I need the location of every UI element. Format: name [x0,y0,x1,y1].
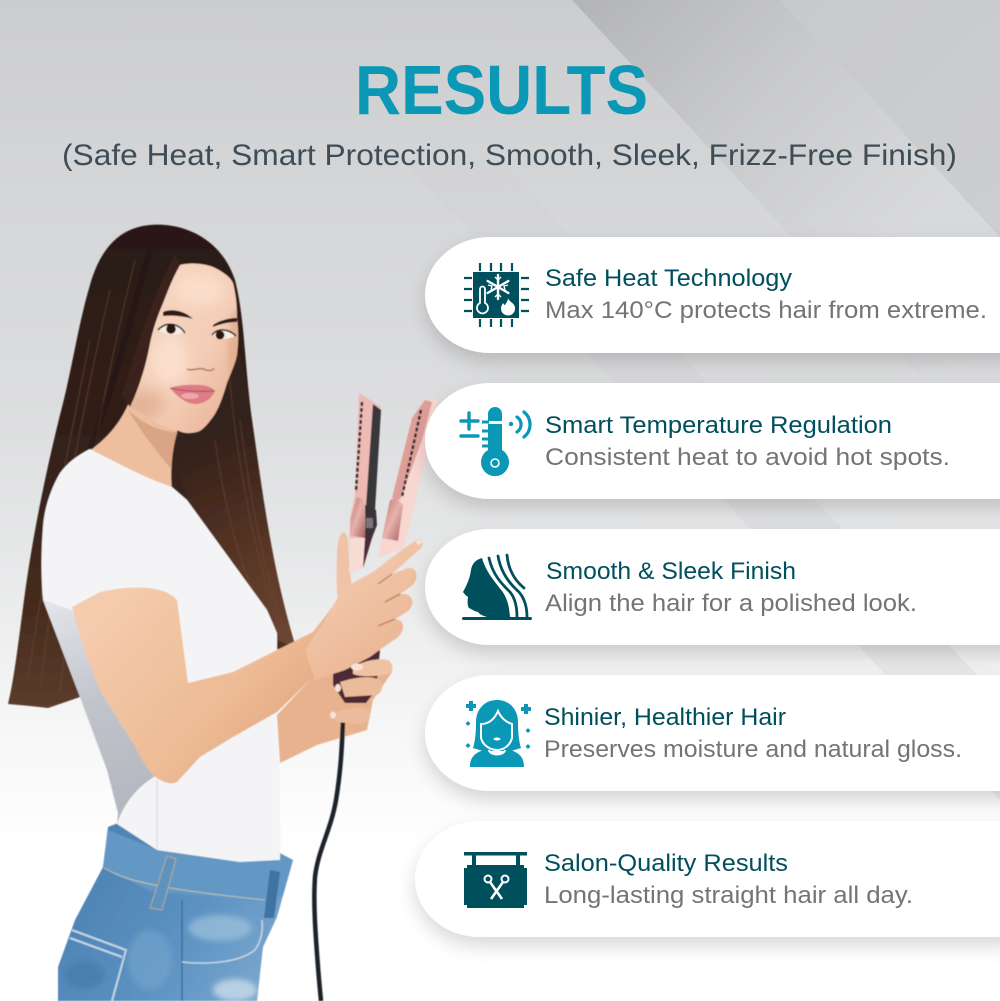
nose [187,368,214,371]
text: salon-quality description: Long-lasting straight hair all day. [544,882,913,909]
subtitle: (Safe Heat, Smart Protection, Smooth, Sleek, Frizz-Free Finish) [62,139,957,172]
lower hand [277,660,392,763]
power cord [314,720,343,1001]
text: safe heat technology: Safe Heat Technology [545,265,793,292]
thumb [337,532,352,600]
lips [170,385,215,404]
eyes [158,324,236,339]
panel: salon-quality results [415,821,1000,937]
neck shadow [128,410,178,470]
panel: smooth and sleek finish [425,529,1000,645]
title: RESULTS [355,51,648,129]
face shading [130,274,239,422]
text: smart temperature description: Consistent heat to avoid hot spots. [545,444,950,471]
text: smooth and sleek finish: Smooth & Sleek Finish [546,558,796,585]
text: salon-quality results: Salon-Quality Results [544,850,788,877]
text: smooth and sleek description: Align the hair for a polished look. [545,590,917,617]
icon: thermometer with signal [461,407,530,476]
icon: chip with temperature [464,263,529,327]
icon: salon sign with scissors [464,852,527,908]
jeans [58,823,293,1001]
hand [305,539,423,680]
text: shinier healthier description: Preserves moisture and natural gloss. [544,736,962,763]
straightener [333,393,438,703]
handle grip [333,650,380,703]
face [131,262,240,434]
woman holding hair straightener [8,225,438,1001]
hand fingers [330,540,422,724]
panel: smart temperature regulation [425,383,1000,499]
shirt [42,449,280,862]
left arm [349,393,381,573]
text: safe heat description: Max 140°C protects hair from extreme. [545,297,987,324]
hair [8,225,296,708]
icon: hair profile [462,555,532,620]
front hair strand [122,255,180,407]
icon: woman with shiny hair [466,700,531,767]
neck [88,400,178,490]
panel: safe heat technology [425,237,1000,353]
right arm [378,398,438,558]
text: shinier healthier hair: Shinier, Healthier Hair [544,704,786,731]
panel: shinier healthier hair [425,675,1000,791]
arm [72,587,345,783]
text: smart temperature regulation: Smart Temperature Regulation [545,412,892,439]
